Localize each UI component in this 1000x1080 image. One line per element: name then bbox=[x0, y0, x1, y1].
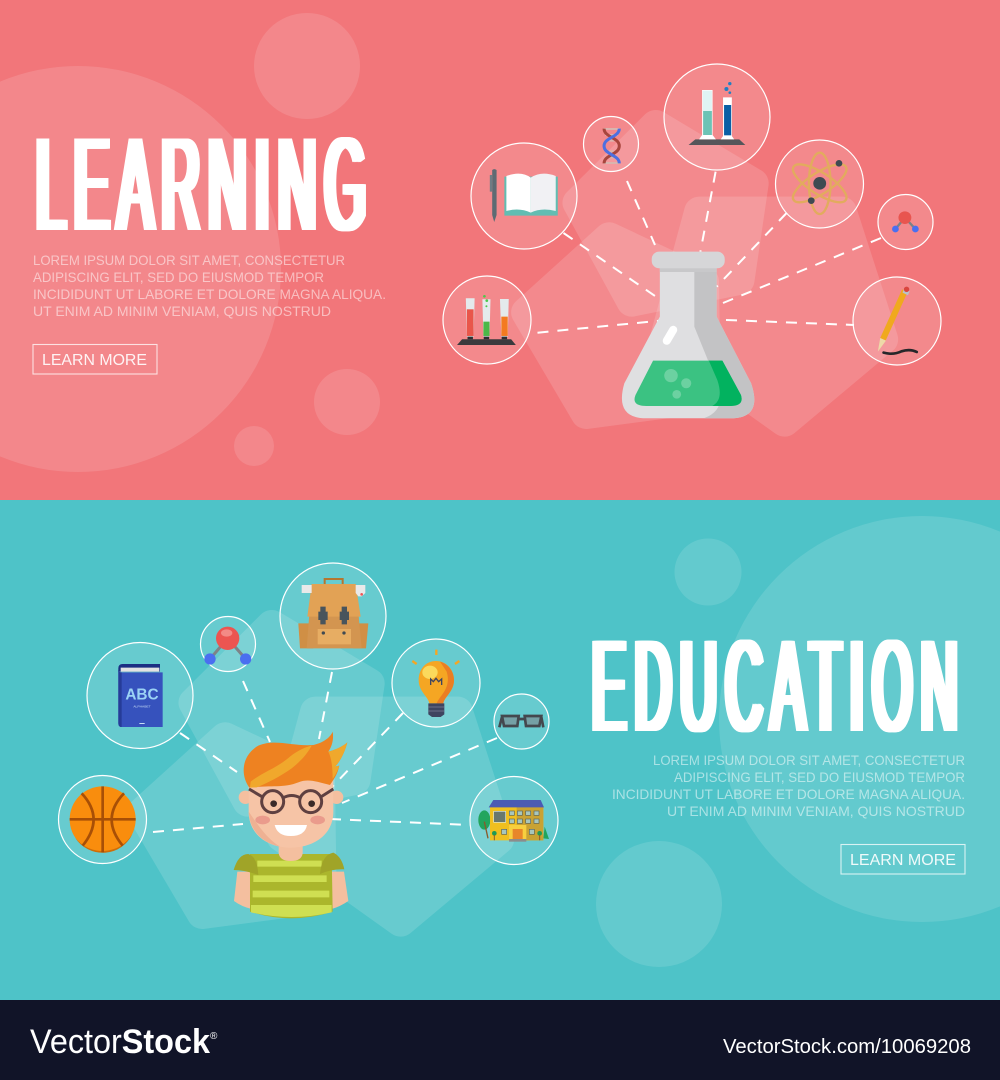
rounded background shapes bbox=[526, 125, 883, 422]
icon: basketball bbox=[70, 786, 136, 853]
panel: learning bbox=[0, 0, 1000, 500]
icon: school building bbox=[478, 800, 549, 842]
ears bbox=[239, 791, 252, 804]
panel: education bbox=[0, 500, 1000, 1000]
face bbox=[249, 778, 333, 848]
icons drawn in zoom coordinates bbox=[457, 82, 919, 418]
icon: book and pen bbox=[490, 169, 558, 222]
eyes bbox=[270, 800, 277, 807]
icon: pencil bbox=[878, 287, 917, 354]
title: learning: LEARNING bbox=[32, 111, 370, 259]
illustration: boy bbox=[234, 732, 348, 918]
text block: learning bbox=[33, 253, 386, 319]
icon: measuring cylinders bbox=[689, 82, 745, 145]
hair bbox=[244, 732, 347, 788]
icon: abc book: ALPHABET bbox=[133, 705, 151, 708]
button: learn more bbox=[841, 844, 965, 874]
logo: vectorstock: VectorStock bbox=[30, 1023, 210, 1061]
icon: glasses bbox=[499, 716, 543, 727]
connector lines bbox=[538, 172, 881, 333]
text block: learning: LOREM IPSUM DOLOR SIT AMET, CONSECTETUR bbox=[33, 253, 345, 268]
icons drawn in zoom coordinates bbox=[70, 579, 549, 918]
text block: education: LOREM IPSUM DOLOR SIT AMET, CONSECTETUR bbox=[653, 753, 965, 768]
icon: backpack bbox=[298, 579, 368, 648]
hair stripes bbox=[250, 742, 347, 788]
icon: abc book: ABC bbox=[125, 686, 159, 703]
icon: flask bbox=[622, 252, 754, 418]
glasses bbox=[249, 789, 333, 813]
image id: VectorStock.com/10069208 bbox=[723, 1036, 971, 1058]
title: education: EDUCATION bbox=[588, 612, 962, 759]
button: learn more: LEARN MORE bbox=[850, 852, 956, 869]
icon: light bulb bbox=[412, 650, 459, 717]
text block: learning: UT ENIM AD MINIM VENIAM, QUIS NOSTRUD bbox=[33, 304, 331, 319]
button: learn more bbox=[33, 344, 157, 374]
circle rings bbox=[443, 64, 941, 365]
shirt stripes bbox=[251, 861, 332, 917]
text block: learning: ADIPISCING ELIT, SED DO EIUSMOD TEMPOR bbox=[33, 270, 324, 285]
text block: education: ADIPISCING ELIT, SED DO EIUSMOD TEMPOR bbox=[674, 770, 965, 785]
icon: dna bbox=[604, 129, 619, 163]
circle rings bbox=[58, 563, 558, 864]
background circles bbox=[0, 13, 380, 472]
cheeks bbox=[255, 816, 270, 824]
arms bbox=[234, 872, 348, 909]
sleeves bbox=[234, 853, 344, 875]
icon: molecule bbox=[892, 211, 919, 232]
logo: registered mark: ® bbox=[210, 1031, 218, 1042]
icon: abc book bbox=[118, 664, 163, 727]
mouth bbox=[275, 825, 307, 836]
rounded background shapes bbox=[142, 625, 499, 922]
icon: test tube rack bbox=[457, 295, 516, 345]
text block: learning: INCIDIDUNT UT LABORE ET DOLORE MAGNA ALIQUA. bbox=[33, 287, 386, 302]
text block: education bbox=[612, 753, 965, 819]
text block: education: UT ENIM AD MINIM VENIAM, QUIS NOSTRUD bbox=[667, 804, 965, 819]
button: learn more: LEARN MORE bbox=[42, 352, 147, 369]
text block: education: INCIDIDUNT UT LABORE ET DOLORE MAGNA ALIQUA. bbox=[612, 787, 965, 802]
shirt bbox=[250, 854, 333, 918]
background circles bbox=[596, 516, 1000, 967]
icon: atom bbox=[788, 153, 852, 214]
footer bar bbox=[0, 1000, 1000, 1080]
neck bbox=[279, 838, 303, 861]
icon: molecule bbox=[204, 627, 251, 665]
connector lines bbox=[153, 672, 497, 832]
